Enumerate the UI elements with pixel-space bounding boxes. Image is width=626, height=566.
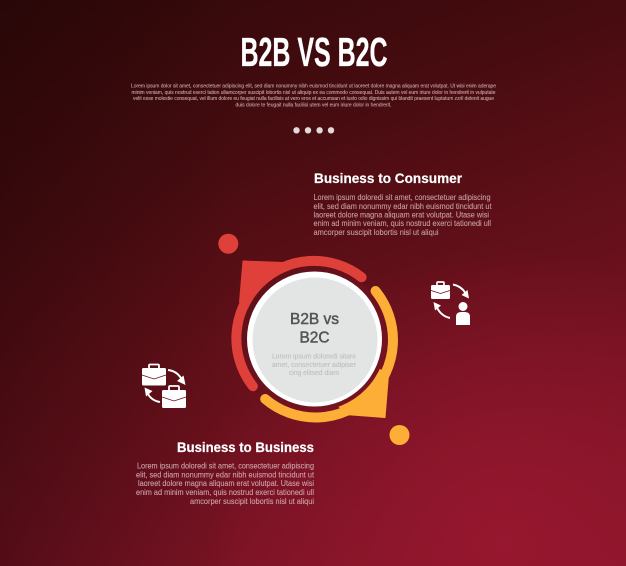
text: business description: laoreet dolore magna aliquam erat volutpat. Utase wisi xyxy=(138,478,314,488)
dark ring xyxy=(242,266,386,411)
text: business description: elit, sed diam nonummy edar nibh euismod tincidunt ut xyxy=(136,469,315,479)
title: B2B VS B2C xyxy=(240,29,388,75)
panel: business to consumer xyxy=(314,171,492,237)
centre description: amet, consectetuer adipiser xyxy=(272,362,357,369)
centre title xyxy=(290,311,339,346)
red arc with corner xyxy=(236,261,362,386)
icon: business to business xyxy=(142,364,186,408)
text: business description: enim ad minim veniam, quis nostrud exerci tationedi ull xyxy=(136,487,314,497)
centre description: cing elitsed diam xyxy=(289,370,339,377)
pagination dots xyxy=(293,127,334,134)
centre description xyxy=(272,354,357,377)
text: consumer description: Lorem ipsum doloredi sit amet, consectetuer adipiscing xyxy=(314,192,491,202)
intro text block: duis dolore te feugait nulla facilisi utem vel eum iriure dolor in hendrerit. xyxy=(236,102,392,108)
centre title: B2B vs xyxy=(290,311,339,328)
red dot xyxy=(218,234,238,254)
white ring xyxy=(247,272,382,406)
heading: business to business: Business to Business xyxy=(177,440,314,455)
text: business description xyxy=(136,460,315,506)
yellow dot xyxy=(390,425,410,445)
text: business description: Lorem ipsum doloredi sit amet, consectetuer adipiscing xyxy=(137,460,314,470)
text: consumer description: elit, sed diam nonummy edar nibh euismod tincidunt ut xyxy=(314,201,492,211)
text: business description: amcorper suscipit lobortis nisl ut aliqui xyxy=(190,496,314,506)
yellow arc with corner xyxy=(265,291,393,418)
intro text block xyxy=(131,84,496,108)
intro text block: minim veniam, quis nostrud exerci tation ullamcorper suscipit lobortis nisl ut aliquip ex ea commodo consequat. Duis autem vel eum iriure dolor in hendrerit in vulputate xyxy=(132,90,496,96)
panel: business to business xyxy=(136,440,315,506)
text: consumer description: amcorper suscipit lobortis nisl ut aliqui xyxy=(314,227,439,237)
text: consumer description xyxy=(314,192,492,237)
intro text block: velit esse molestie consequat, vel illum dolore eu feugiat nulla facilisis at vero eros et accumsan et iusto odio dignissim qui blandit praesent luptatum zzril delenit augue xyxy=(133,96,494,102)
centre description: Lorem ipsum doloredi sitare xyxy=(272,354,356,360)
circle diagram xyxy=(236,261,393,418)
icon: business to consumer xyxy=(431,282,470,325)
text: consumer description: laoreet dolore magna aliquam erat volutpat. Utase wisi xyxy=(314,210,489,220)
intro text block: Lorem ipsum dolor sit amet, consectetuer adipiscing elit, sed diam nonummy nibh euismod tincidunt ut laoreet dolore magna aliquam erat volutpat. Ut wisi enim aderape xyxy=(131,84,496,90)
text: consumer description: enim ad minim veniam, quis nostrud exerci tationedi ull xyxy=(314,218,491,228)
heading: business to consumer: Business to Consumer xyxy=(314,171,463,186)
centre title: B2C xyxy=(300,330,330,346)
grey centre disc xyxy=(252,278,378,402)
